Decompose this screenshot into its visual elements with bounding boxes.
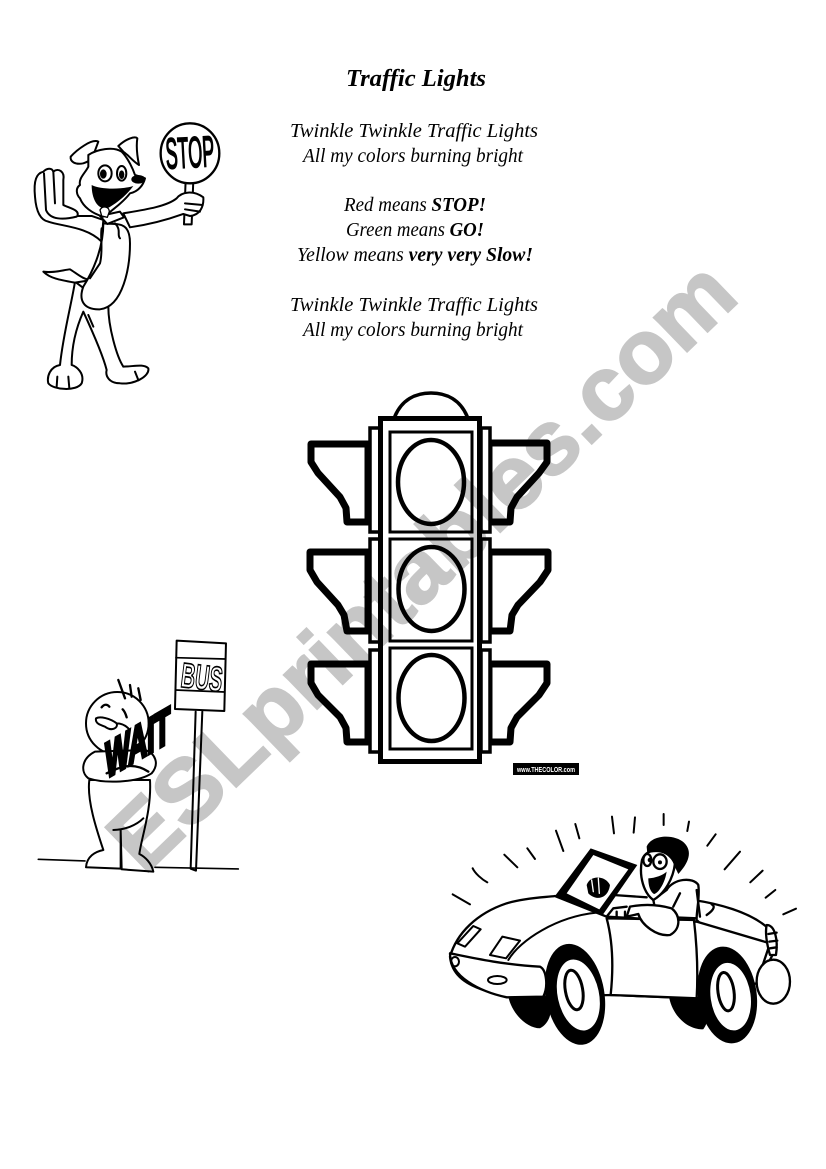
traffic light bbox=[310, 393, 579, 775]
housing bbox=[380, 418, 480, 762]
red lamp bbox=[390, 432, 472, 532]
stop sign bbox=[161, 123, 219, 183]
green lamp bbox=[390, 648, 472, 749]
driver in convertible car bbox=[450, 814, 796, 1050]
poem text bbox=[290, 120, 538, 341]
credit tag bbox=[513, 763, 579, 775]
poem text: Twinkle Twinkle Traffic Lights bbox=[290, 294, 538, 316]
poem text: Twinkle Twinkle Traffic Lights bbox=[290, 120, 538, 142]
side brackets bbox=[370, 428, 490, 752]
bus sign: BUS bbox=[179, 656, 225, 700]
bumper bbox=[450, 953, 546, 997]
dog holding stop sign bbox=[35, 123, 219, 389]
poem text: Yellow means very very Slow! bbox=[297, 244, 533, 266]
poem text: All my colors burning bright bbox=[301, 319, 523, 341]
headlights bbox=[457, 913, 597, 960]
poem text: All my colors burning bright bbox=[301, 145, 523, 167]
right visors bbox=[489, 443, 548, 742]
tyre shadows bbox=[508, 997, 709, 1029]
left visors bbox=[310, 444, 368, 742]
worksheet page: STOP bbox=[164, 128, 216, 179]
front wheel bbox=[537, 939, 613, 1050]
fuzzy dice and spare wheel bbox=[757, 925, 790, 1004]
bus stop pole bbox=[191, 712, 202, 871]
poem text: Green means GO! bbox=[346, 219, 484, 241]
yellow lamp bbox=[390, 539, 472, 641]
excitement rays bbox=[453, 814, 796, 914]
poem text: Red means STOP! bbox=[343, 194, 486, 216]
dome bbox=[395, 393, 467, 416]
wait lettering: WAIT bbox=[105, 697, 170, 790]
bus sign bbox=[175, 641, 226, 711]
car body bbox=[450, 896, 770, 998]
rear wheel bbox=[691, 943, 763, 1047]
ground bbox=[38, 859, 238, 869]
credit tag: www.THECOLOR.com bbox=[516, 767, 575, 774]
tail fin bbox=[693, 900, 775, 980]
body bbox=[83, 680, 156, 872]
watermark: ESLprintables.com bbox=[88, 242, 755, 890]
man waiting at bus stop bbox=[38, 641, 238, 872]
door bbox=[607, 918, 697, 998]
driver bbox=[607, 837, 700, 935]
title: Traffic Lights bbox=[346, 66, 486, 92]
windscreen bbox=[555, 848, 637, 915]
